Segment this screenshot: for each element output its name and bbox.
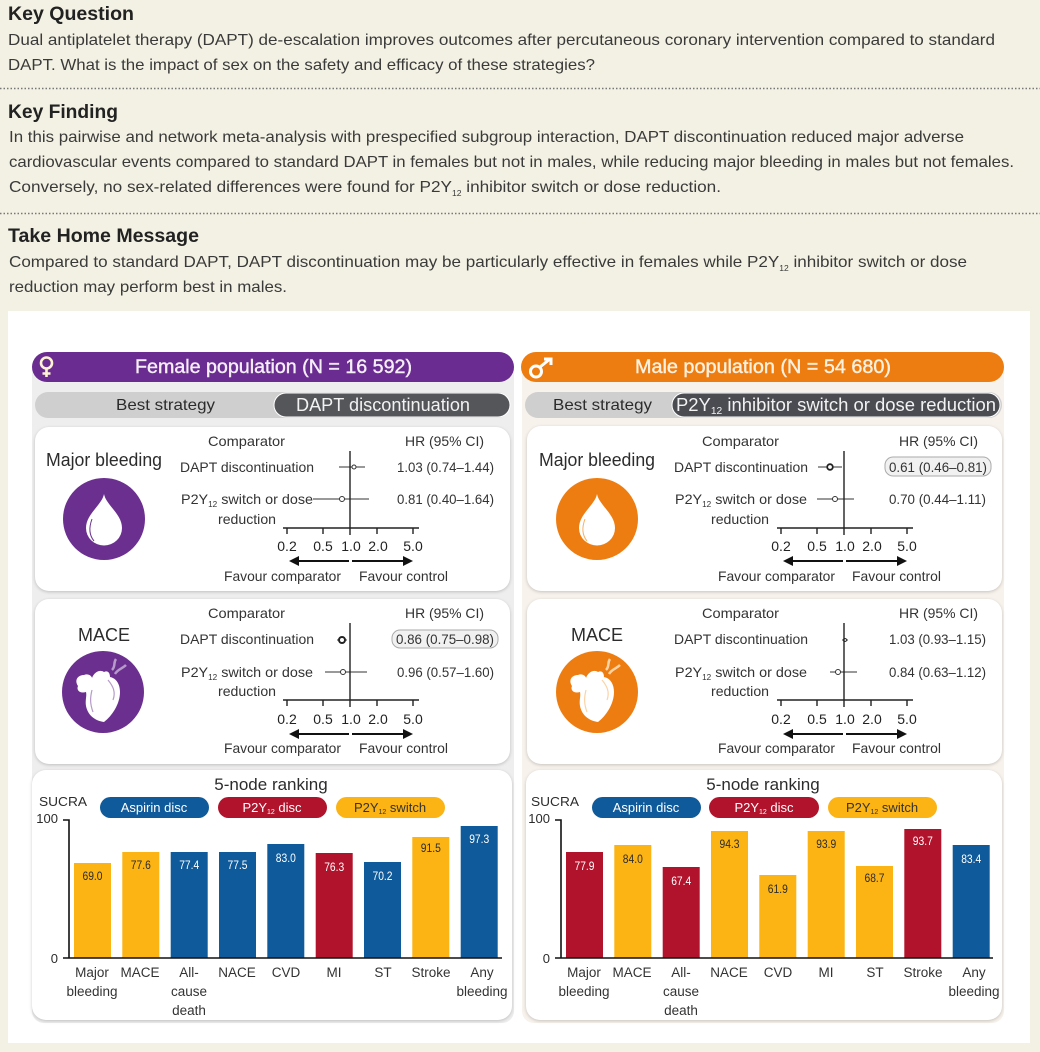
bar chart: female SUCRA: bleeding: [66, 984, 118, 999]
bar chart: female SUCRA: 83.0: [276, 851, 296, 865]
legend: switch: [386, 800, 426, 815]
forest plot: female MACE: 2.0: [368, 711, 388, 727]
legend: P2Y: [242, 800, 267, 815]
forest plot: male MACE: 0.84 (0.63–1.12): [889, 664, 986, 680]
legend: 12: [379, 809, 386, 816]
text block: key question: [8, 4, 995, 74]
text block: key finding: inhibitor switch or dose reduction.: [462, 179, 721, 196]
text block: key finding: Key Finding: [8, 102, 118, 123]
forest plot: male MACE: Comparator: [702, 605, 779, 621]
bar chart: male SUCRA: SUCRA: [531, 794, 579, 809]
forest plot: male MACE: 0.5: [807, 711, 827, 727]
bar chart: female SUCRA: 77.4: [179, 858, 199, 872]
card: male MACE: [527, 599, 1002, 764]
bar chart: male SUCRA: 93.9: [816, 837, 836, 851]
bar chart: female SUCRA: Major: [75, 965, 109, 980]
legend: disc: [767, 800, 794, 815]
forest plot: male MACE: 1.0: [835, 711, 855, 727]
forest plot: female major bleeding: P2Y: [181, 491, 207, 507]
bar chart: male SUCRA: 61.9: [768, 882, 788, 896]
forest plot: female MACE: 12: [208, 673, 218, 682]
forest plot: female MACE: 0.96 (0.57–1.60): [397, 664, 494, 680]
forest plot: female MACE: Comparator: [208, 605, 285, 621]
legend: switch: [878, 800, 918, 815]
best strategy: female: Best strategy: [116, 397, 215, 414]
bar chart: female SUCRA: NACE: [218, 965, 256, 980]
forest plot: male major bleeding: Favour control: [852, 568, 941, 584]
bar chart: female SUCRA: cause: [171, 984, 207, 999]
text block: take home message: reduction may perform best in males.: [9, 279, 287, 296]
legend: [592, 797, 937, 818]
forest plot: male major bleeding: 2.0: [862, 538, 882, 554]
forest plot: female major bleeding: DAPT discontinuation: [180, 459, 314, 475]
bar chart: female SUCRA: [36, 794, 508, 1018]
bar chart: male SUCRA: 94.3: [720, 837, 740, 851]
bar chart: female SUCRA: 69.0: [82, 869, 103, 883]
bar chart: male SUCRA: bleeding: [948, 984, 1000, 999]
forest plot: male MACE: reduction: [711, 683, 769, 699]
legend: disc: [275, 800, 302, 815]
text block: take home message: 12: [779, 264, 789, 273]
forest plot: male major bleeding: HR (95% CI): [899, 433, 978, 449]
text block: take home message: inhibitor switch or dose: [789, 254, 967, 271]
card: male major bleeding: Major bleeding: [539, 450, 655, 470]
forest plot: male major bleeding: 0.70 (0.44–1.11): [889, 491, 986, 507]
bar chart: male SUCRA: NACE: [710, 965, 748, 980]
legend: 12: [759, 809, 767, 816]
forest plot: female major bleeding: Favour comparator: [224, 568, 341, 584]
legend: Aspirin disc: [613, 800, 680, 815]
forest plot: female major bleeding: 1.03 (0.74–1.44): [397, 459, 494, 475]
forest plot: male MACE: 2.0: [862, 711, 882, 727]
header: female population: Female population (N = 16 592): [135, 357, 412, 378]
bar chart: male SUCRA: 83.4: [961, 852, 981, 866]
bar chart: male SUCRA: cause: [663, 984, 699, 999]
bar chart: male SUCRA: Any: [962, 965, 986, 980]
text block: key finding: In this pairwise and network meta-analysis with prespecified subgroup interaction, DAPT discontinuation reduced major adverse: [9, 129, 964, 146]
icon: blood drop: [63, 478, 145, 560]
card: male 5-node ranking: 5-node ranking: [706, 775, 820, 794]
bar chart: male SUCRA: 0: [543, 951, 550, 966]
bar chart: male SUCRA: CVD: [764, 965, 792, 980]
text block: key finding: cardiovascular events compared to standard DAPT in females but not in males, while reducing major bleeding in males but not females.: [9, 154, 1014, 171]
text block: key question: DAPT. What is the impact of sex on the safety and efficacy of these strategies?: [8, 57, 595, 74]
forest plot: female MACE: 0.5: [313, 711, 333, 727]
card: female MACE: MACE: [78, 625, 130, 645]
forest plot: male major bleeding: P2Y: [675, 491, 701, 507]
icon: blood drop: [556, 478, 638, 560]
bar chart: male SUCRA: 93.7: [913, 834, 933, 848]
forest plot: female MACE: DAPT discontinuation: [180, 631, 314, 647]
icon: heart: [556, 651, 638, 733]
forest plot: female major bleeding: 0.5: [313, 538, 333, 554]
forest plot: female major bleeding: Comparator: [208, 433, 285, 449]
bar chart: male SUCRA: Stroke: [903, 965, 943, 980]
card: female major bleeding: Major bleeding: [46, 450, 162, 470]
text block: take home message: Compared to standard DAPT, DAPT discontinuation may be particularly effective in females while P2Y: [9, 254, 731, 271]
icon: female symbol: [41, 358, 52, 377]
best strategy: male: [525, 392, 1002, 418]
forest plot: female MACE: P2Y: [181, 664, 207, 680]
bar chart: female SUCRA: 97.3: [469, 832, 489, 846]
bar chart: male SUCRA: 67.4: [671, 874, 691, 888]
bar chart: male SUCRA: 68.7: [864, 871, 885, 885]
card: female 5-node ranking: [32, 770, 512, 1020]
forest plot: female MACE: Favour control: [359, 740, 448, 756]
legend: P2Y: [846, 800, 871, 815]
forest plot: female major bleeding: Favour control: [359, 568, 448, 584]
card: male MACE: MACE: [571, 625, 623, 645]
bar chart: female SUCRA: CVD: [272, 965, 300, 980]
bar chart: female SUCRA: 0: [51, 951, 58, 966]
forest plot: female MACE: switch or dose: [217, 664, 313, 680]
card: female 5-node ranking: 5-node ranking: [214, 775, 328, 794]
header: male population: Male population (N = 54 680): [635, 357, 891, 378]
card: female major bleeding: [35, 427, 510, 591]
forest plot: female MACE: HR (95% CI): [405, 605, 484, 621]
forest plot: male MACE: Favour control: [852, 740, 941, 756]
header: male population: [521, 352, 1004, 382]
panel: male population: [521, 352, 1004, 1023]
bar chart: female SUCRA: MACE: [120, 965, 160, 980]
bar chart: female SUCRA: ST: [374, 965, 392, 980]
text block: take home message: Take Home Message: [8, 226, 199, 247]
forest plot: male MACE: [674, 605, 986, 756]
text block: key finding: [8, 102, 1014, 198]
bar chart: male SUCRA: MACE: [612, 965, 652, 980]
legend: 12: [267, 809, 275, 816]
bar chart: male SUCRA: 100: [528, 811, 550, 826]
bar chart: female SUCRA: 70.2: [372, 869, 393, 883]
text block: key question: Key Question: [8, 4, 134, 25]
bar chart: female SUCRA: SUCRA: [39, 794, 87, 809]
forest plot: male MACE: HR (95% CI): [899, 605, 978, 621]
forest plot: male MACE: DAPT discontinuation: [674, 631, 808, 647]
bar chart: female SUCRA: Any: [470, 965, 494, 980]
best strategy: female: [35, 392, 510, 418]
forest plot: male major bleeding: 0.5: [807, 538, 827, 554]
forest plot: male MACE: P2Y: [675, 664, 701, 680]
text block: key finding: 12: [452, 189, 462, 198]
forest plot: male MACE: switch or dose: [711, 664, 807, 680]
bar chart: male SUCRA: 77.9: [574, 859, 595, 873]
bar chart: male SUCRA: Major: [567, 965, 601, 980]
forest plot: female major bleeding: 1.0: [341, 538, 361, 554]
forest plot: female major bleeding: 5.0: [403, 538, 423, 554]
best strategy: female: DAPT discontinuation: [296, 395, 470, 415]
forest plot: male major bleeding: Comparator: [702, 433, 779, 449]
legend: P2Y: [734, 800, 759, 815]
icon: heart: [62, 651, 144, 733]
forest plot: female major bleeding: 0.81 (0.40–1.64): [397, 491, 494, 507]
bar chart: female SUCRA: MI: [326, 965, 342, 980]
bar chart: female SUCRA: bleeding: [456, 984, 508, 999]
bar chart: female SUCRA: 77.5: [228, 858, 248, 872]
forest plot: male major bleeding: DAPT discontinuation: [674, 459, 808, 475]
best strategy: male: inhibitor switch or dose reduction: [722, 395, 996, 415]
forest plot: male major bleeding: 1.0: [835, 538, 855, 554]
bar chart: male SUCRA: ST: [866, 965, 884, 980]
card: male major bleeding: [527, 426, 1002, 591]
forest plot: female major bleeding: 2.0: [368, 538, 388, 554]
forest plot: male major bleeding: 0.2: [771, 538, 791, 554]
best strategy: male: P2Y: [676, 395, 710, 415]
best strategy: male: Best strategy: [553, 397, 652, 414]
panel: female population: [32, 352, 514, 1023]
bar chart: male SUCRA: 84.0: [623, 852, 643, 866]
forest plot: female MACE: 5.0: [403, 711, 423, 727]
text block: key question: Dual antiplatelet therapy (DAPT) de-escalation improves outcomes after percutaneous coronary intervention compared to standard: [8, 32, 995, 49]
legend: 12: [871, 809, 878, 816]
legend: [100, 797, 445, 818]
forest plot: male major bleeding: Favour comparator: [718, 568, 835, 584]
forest plot: male MACE: 1.03 (0.93–1.15): [889, 631, 986, 647]
card: male 5-node ranking: [526, 770, 1002, 1020]
forest plot: female major bleeding: switch or dose: [217, 491, 313, 507]
panel: white graphical abstract background: [8, 311, 1030, 1043]
forest plot: female major bleeding: HR (95% CI): [405, 433, 484, 449]
forest plot: male major bleeding: 0.61 (0.46–0.81): [889, 459, 987, 475]
icon: male symbol: [530, 359, 551, 377]
forest plot: female MACE: reduction: [218, 683, 276, 699]
header: female population: [32, 352, 514, 382]
bar chart: male SUCRA: bleeding: [558, 984, 610, 999]
forest plot: female MACE: Favour comparator: [224, 740, 341, 756]
bar chart: male SUCRA: [528, 794, 1000, 1018]
bar chart: female SUCRA: 76.3: [324, 860, 344, 874]
forest plot: female MACE: 1.0: [341, 711, 361, 727]
forest plot: female major bleeding: 12: [208, 500, 218, 509]
forest plot: male MACE: 0.2: [771, 711, 791, 727]
legend: Aspirin disc: [121, 800, 188, 815]
bar chart: female SUCRA: 100: [36, 811, 58, 826]
bar chart: male SUCRA: All-: [671, 965, 691, 980]
bar chart: male SUCRA: MI: [818, 965, 834, 980]
forest plot: female major bleeding: [180, 433, 494, 584]
forest plot: female major bleeding: reduction: [218, 511, 276, 527]
forest plot: male major bleeding: reduction: [711, 511, 769, 527]
forest plot: female MACE: [180, 605, 498, 756]
forest plot: male major bleeding: [674, 433, 991, 584]
best strategy: male: 12: [711, 406, 723, 417]
legend: P2Y: [354, 800, 379, 815]
forest plot: male MACE: 12: [702, 673, 712, 682]
bar chart: female SUCRA: death: [172, 1003, 206, 1018]
forest plot: male MACE: 5.0: [897, 711, 917, 727]
forest plot: male major bleeding: 5.0: [897, 538, 917, 554]
bar chart: male SUCRA: death: [664, 1003, 698, 1018]
forest plot: male MACE: Favour comparator: [718, 740, 835, 756]
bar chart: female SUCRA: 77.6: [131, 858, 151, 872]
forest plot: male major bleeding: 12: [702, 500, 712, 509]
forest plot: male major bleeding: switch or dose: [711, 491, 807, 507]
text block: key finding: Conversely, no sex-related differences were found for P2Y: [9, 179, 422, 196]
bar chart: female SUCRA: All-: [179, 965, 199, 980]
forest plot: female major bleeding: 0.2: [277, 538, 297, 554]
text block: take home message: [8, 226, 967, 296]
card: female MACE: [35, 599, 510, 764]
bar chart: female SUCRA: Stroke: [411, 965, 451, 980]
forest plot: female MACE: 0.2: [277, 711, 297, 727]
forest plot: female MACE: 0.86 (0.75–0.98): [396, 631, 494, 647]
bar chart: female SUCRA: 91.5: [421, 841, 441, 855]
